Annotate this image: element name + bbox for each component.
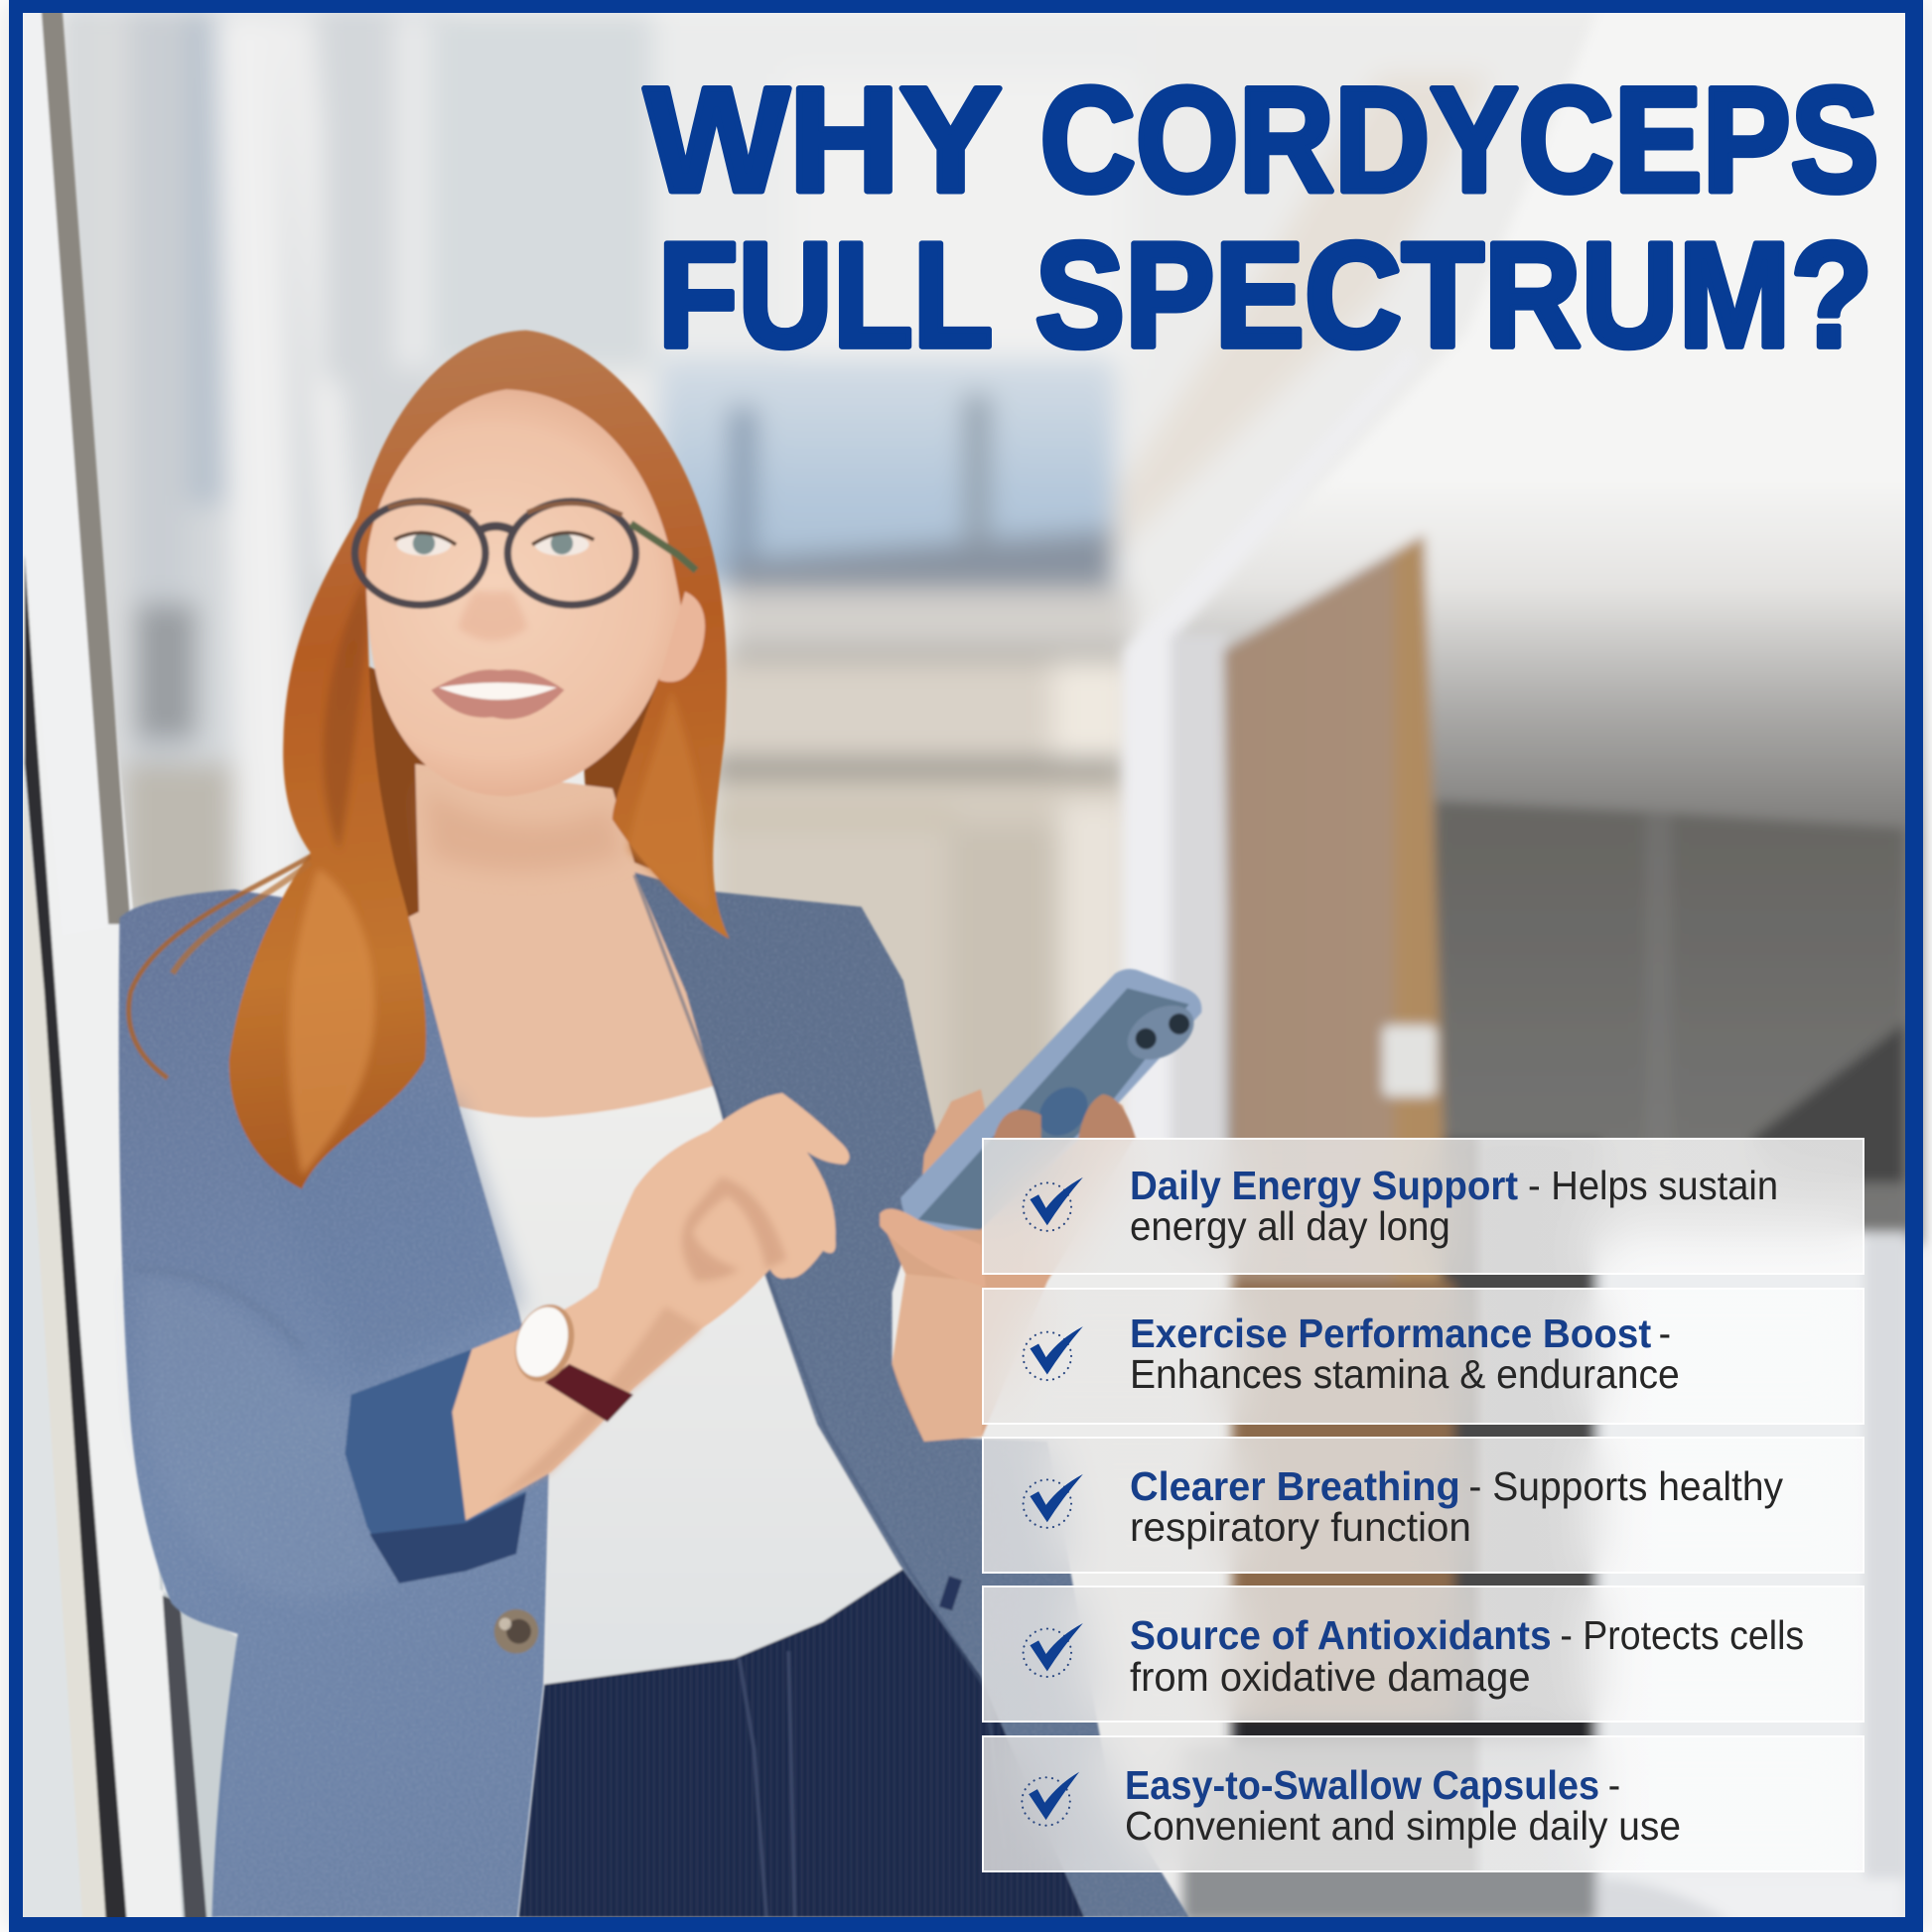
text: clearer breathing: - Supports healthy — [1468, 1463, 1784, 1509]
white top — [450, 1077, 905, 1685]
text: clearer breathing: Clearer Breathing — [1130, 1463, 1460, 1509]
hair behind neck — [364, 665, 690, 936]
text: easy-to-swallow capsules: Easy-to-Swallow Capsules — [1125, 1762, 1599, 1808]
smile — [431, 669, 564, 719]
title: WHY — [644, 56, 1002, 222]
trouser zipper — [740, 1651, 794, 1917]
text: source of antioxidants: Source of Antioxidants — [1130, 1612, 1552, 1658]
phone-holding fingers — [880, 1208, 986, 1288]
face — [366, 389, 688, 796]
text: exercise performance boost — [1130, 1311, 1680, 1397]
text: exercise performance boost: Exercise Performance Boost — [1130, 1311, 1652, 1356]
text: easy-to-swallow capsules — [1125, 1762, 1681, 1849]
text: clearer breathing — [1130, 1463, 1784, 1550]
panel: clearer breathing — [982, 1437, 1864, 1574]
title: FULL — [658, 211, 993, 378]
woman — [118, 331, 1203, 1917]
rolled sleeve cuff — [345, 1349, 526, 1584]
neck and chest — [394, 763, 740, 1118]
text: easy-to-swallow capsules: - — [1608, 1762, 1620, 1808]
text: source of antioxidants: - Protects cells — [1560, 1612, 1804, 1658]
wrist watch — [505, 1297, 633, 1422]
icon: check 5 — [1022, 1772, 1079, 1826]
text: easy-to-swallow capsules: Convenient and simple daily use — [1125, 1803, 1681, 1849]
panel: daily energy support — [982, 1138, 1864, 1275]
wall and door — [1124, 0, 1922, 1922]
text: daily energy support: energy all day long — [1130, 1203, 1450, 1249]
jacket — [118, 873, 1189, 1917]
icon: check 2 — [1024, 1326, 1083, 1380]
nose — [459, 592, 527, 640]
smartphone — [900, 969, 1203, 1231]
icon: check 1 — [1024, 1177, 1083, 1231]
panel: easy-to-swallow capsules — [982, 1735, 1864, 1872]
trousers — [518, 1565, 1084, 1917]
hair — [229, 331, 730, 1189]
text: exercise performance boost: Enhances stamina & endurance — [1130, 1351, 1680, 1397]
panel: exercise performance boost — [982, 1288, 1864, 1425]
text: source of antioxidants: from oxidative damage — [1130, 1654, 1531, 1700]
text: daily energy support — [1130, 1163, 1778, 1249]
eyes — [388, 501, 622, 556]
icon: check 4 — [1024, 1623, 1083, 1677]
button — [494, 1609, 538, 1654]
text: daily energy support: Daily Energy Support — [1130, 1163, 1518, 1208]
text: source of antioxidants — [1130, 1612, 1804, 1700]
text: exercise performance boost: - — [1659, 1311, 1671, 1356]
glasses — [354, 501, 696, 605]
text: clearer breathing: respiratory function — [1130, 1504, 1471, 1550]
right forearm and hand — [880, 1089, 1135, 1442]
text: daily energy support: - Helps sustain — [1528, 1163, 1778, 1208]
forearm and hand — [452, 1093, 850, 1520]
window frame at left — [22, 0, 240, 1922]
panel: source of antioxidants — [982, 1586, 1864, 1723]
icon: check 3 — [1024, 1474, 1083, 1528]
